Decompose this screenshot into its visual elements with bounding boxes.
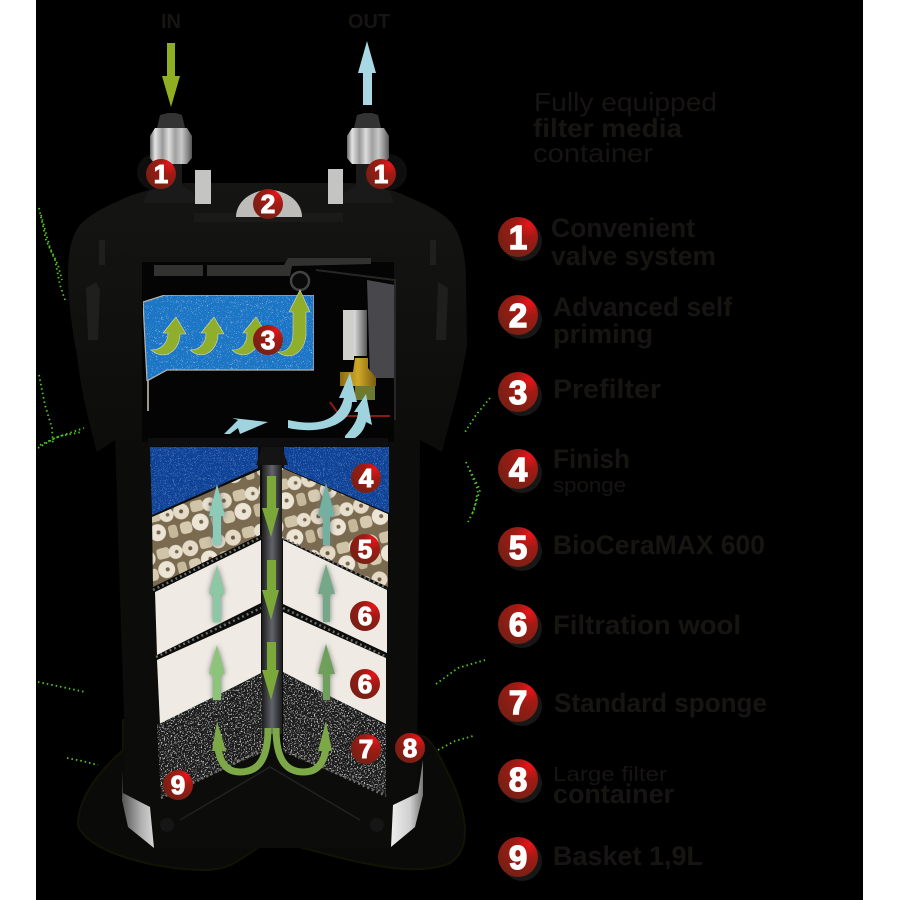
flow arrow middle (288, 373, 357, 430)
curved arrow 4 (278, 290, 310, 356)
legend item 8 (498, 759, 674, 809)
badge 6 lower (350, 669, 380, 699)
legend list (498, 213, 767, 881)
finish sponge right (284, 447, 389, 513)
legend item 6: Filtration wool (553, 610, 741, 640)
pump assembly (316, 270, 395, 420)
down arrows (262, 476, 279, 700)
up arrows (209, 483, 335, 700)
legend item 9: Basket 1,9L (553, 841, 703, 871)
badge 3 (253, 325, 283, 355)
legend item 9 (498, 837, 703, 881)
U arrow left (212, 721, 268, 772)
badge 9 (163, 770, 193, 800)
heading: Fully equipped (534, 87, 717, 117)
badge 2 (253, 189, 283, 219)
legend item 1: valve system (551, 241, 716, 271)
badge 8: 8 (403, 733, 417, 763)
pump red edge (330, 402, 390, 416)
outlet arrows (224, 373, 372, 442)
prefilter arrows (151, 290, 310, 356)
legend item 7 (498, 682, 767, 726)
badge 1 left: 1 (154, 159, 168, 189)
housing side latches (86, 240, 448, 340)
down arrow 2 (262, 560, 279, 620)
legend item 7: Standard sponge (554, 688, 767, 718)
pump frame (316, 270, 395, 420)
legend item 7: 7 (509, 684, 527, 721)
up arrow ceramic right (318, 483, 335, 545)
finish sponge left (150, 447, 258, 515)
wheels (160, 818, 384, 832)
badge 9: 9 (171, 770, 185, 800)
tube collar (256, 447, 288, 465)
badge 5 (350, 534, 380, 564)
down arrow 1 (262, 476, 279, 537)
badge 6 upper (350, 601, 380, 631)
pump green base (355, 386, 375, 400)
grey header bars (154, 258, 371, 276)
legend item 9: 9 (509, 839, 527, 876)
wool upper right (283, 540, 387, 653)
legend item 8: container (553, 779, 674, 809)
pump cylinder dark (354, 310, 367, 356)
prefilter outlet ring (291, 272, 309, 290)
down arrow 3 (262, 642, 279, 700)
priming button (236, 190, 302, 217)
legend item 3: Prefilter (553, 374, 662, 404)
media layers (150, 447, 389, 832)
legend item 2: Advanced self (553, 292, 733, 322)
legend item 2: 2 (509, 297, 527, 334)
legend item 1: Convenient (551, 213, 695, 243)
up arrow wool left 2 (209, 645, 225, 700)
diagram badges (146, 159, 425, 800)
legend item 1: 1 (509, 219, 527, 256)
clip left (195, 170, 211, 204)
prefilter sponge (143, 295, 314, 381)
legend item 5: 5 (509, 529, 527, 566)
right foot (391, 760, 423, 847)
housing upper body (68, 183, 467, 452)
badge 3: 3 (261, 325, 275, 355)
flow arrow right (345, 394, 372, 442)
badge 8 (395, 733, 425, 763)
interior inner wall line (147, 381, 149, 411)
valve right (340, 113, 407, 203)
badge 1 right: 1 (374, 159, 388, 189)
legend item 8: Large filter (553, 764, 667, 786)
legend item 4: sponge (553, 475, 626, 497)
badge 1 left (146, 159, 176, 189)
heading: filter media (533, 113, 683, 143)
valve left (137, 113, 197, 203)
badge 7: 7 (359, 734, 373, 764)
badge 4 (351, 463, 381, 493)
legend item 3: 3 (509, 374, 527, 411)
basket floor lines (180, 767, 360, 820)
pump housing (367, 280, 395, 378)
legend item 2: priming (553, 319, 653, 349)
clip right (328, 169, 343, 204)
badge 1 right (366, 159, 396, 189)
badge 5: 5 (358, 534, 372, 564)
ceramic right (282, 468, 388, 587)
legend item 6: 6 (509, 606, 527, 643)
flow arrow left (224, 418, 268, 434)
black sponge right (283, 672, 386, 795)
filter housing (68, 183, 467, 848)
wool lower right (283, 612, 386, 724)
arrow OUT (358, 41, 376, 105)
noise speckles (38, 208, 490, 765)
ceramic left (152, 470, 260, 587)
internal shelf (148, 438, 388, 446)
legend item 4: 4 (509, 451, 528, 488)
up arrow wool left 1 (209, 565, 225, 622)
wool lower left (157, 613, 261, 725)
curved arrow 3 (232, 317, 266, 355)
housing lower body (115, 440, 420, 848)
top black compartment (142, 262, 394, 442)
central tube (262, 452, 282, 734)
layer dividers (153, 537, 387, 798)
legend item 4 (498, 444, 630, 497)
label IN: IN (161, 11, 181, 33)
badge 6 upper: 6 (358, 601, 372, 631)
up arrow wool right 1 (318, 564, 335, 622)
up arrow ceramic left (209, 484, 225, 545)
pump cylinder white (343, 310, 354, 360)
U arrow right (276, 721, 332, 772)
pump gold part (340, 358, 376, 386)
wool upper left (155, 540, 261, 655)
curved arrow 2 (190, 317, 224, 355)
U arrows (212, 721, 332, 772)
badge 4: 4 (359, 463, 374, 493)
left foot (122, 770, 154, 848)
label OUT: OUT (348, 11, 390, 33)
legend item 4: Finish (553, 444, 630, 474)
black sponge left (157, 672, 264, 797)
badge 6 lower: 6 (358, 669, 372, 699)
legend item 5 (498, 527, 765, 571)
up arrow wool right 2 (318, 644, 335, 700)
arrow IN (162, 43, 180, 107)
badge 2: 2 (261, 189, 275, 219)
heading (533, 87, 717, 168)
curved arrow 1 (151, 317, 186, 355)
base shadow (78, 700, 465, 870)
legend item 5: BioCeraMAX 600 (553, 530, 765, 560)
legend item 2 (498, 292, 733, 349)
heading: container (533, 138, 653, 168)
legend item 8: 8 (509, 761, 527, 798)
legend item 1 (498, 213, 716, 271)
legend item 6 (498, 604, 741, 648)
legend item 3 (498, 372, 662, 416)
badge 7 (351, 734, 381, 764)
top lid strip (194, 213, 343, 222)
